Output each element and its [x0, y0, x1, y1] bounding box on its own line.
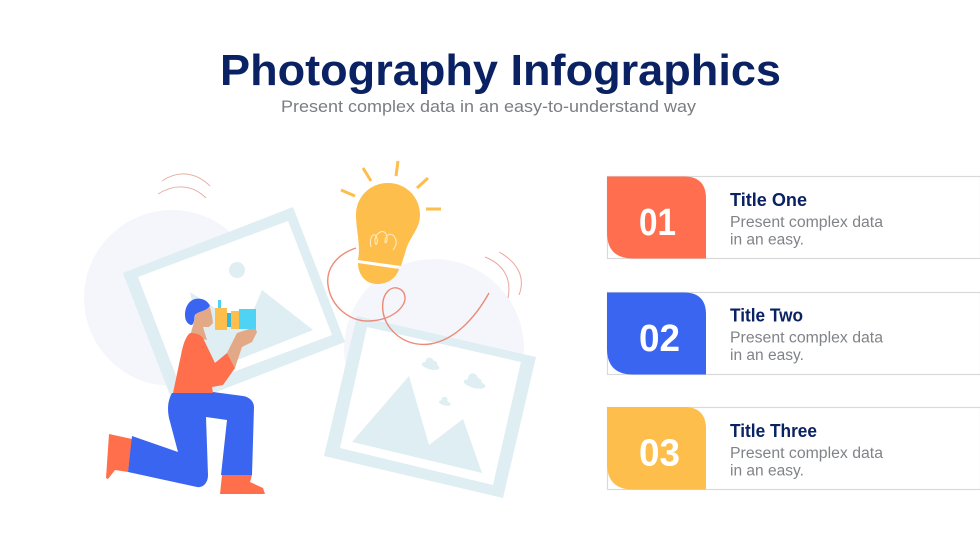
clouds: [421, 356, 488, 407]
badge 01: [607, 176, 706, 258]
card text three: Present complex data: [730, 445, 883, 462]
card text one: Present complex data: [730, 214, 883, 231]
camera: [215, 300, 256, 330]
card text two: Present complex data: [730, 330, 883, 346]
illustration: photographer with photos and light bulb: [84, 161, 536, 498]
title: Photography Infographics: [220, 46, 781, 95]
hair: [185, 299, 210, 325]
badge 03: 03: [639, 432, 680, 474]
curly line: [328, 248, 489, 344]
card text three: in an easy.: [730, 462, 804, 480]
background circle left: [84, 210, 260, 386]
card text two: [730, 306, 883, 364]
card text one: in an easy.: [730, 232, 804, 248]
card text one: [730, 190, 883, 248]
card one: [607, 176, 980, 258]
photographer: [106, 299, 265, 494]
card text two: Title Two: [730, 306, 803, 326]
card text three: Title Three: [730, 421, 817, 441]
badge 03: [607, 407, 706, 490]
badge 01: 01: [639, 202, 676, 244]
icon: light bulb: [341, 161, 441, 284]
sound arcs right: [485, 252, 521, 298]
shirt: [173, 333, 235, 393]
back shoe: [106, 434, 132, 479]
badge 02: [607, 292, 706, 374]
subtitle: Present complex data in an easy-to-understand way: [281, 97, 697, 116]
front shoe: [220, 475, 265, 494]
sound arcs top: [158, 174, 210, 198]
card text one: Title One: [730, 190, 807, 210]
neck and face: [190, 307, 213, 340]
photo frame right: [324, 316, 536, 498]
forearm and hand: [227, 327, 257, 368]
trousers: [128, 392, 254, 487]
badge 02: 02: [639, 318, 680, 360]
card text two: in an easy.: [730, 347, 804, 364]
photo frame left: [123, 207, 345, 408]
card three: [607, 407, 980, 490]
background circle right: [344, 259, 524, 439]
card text three: [730, 421, 883, 480]
card two: [607, 292, 980, 374]
